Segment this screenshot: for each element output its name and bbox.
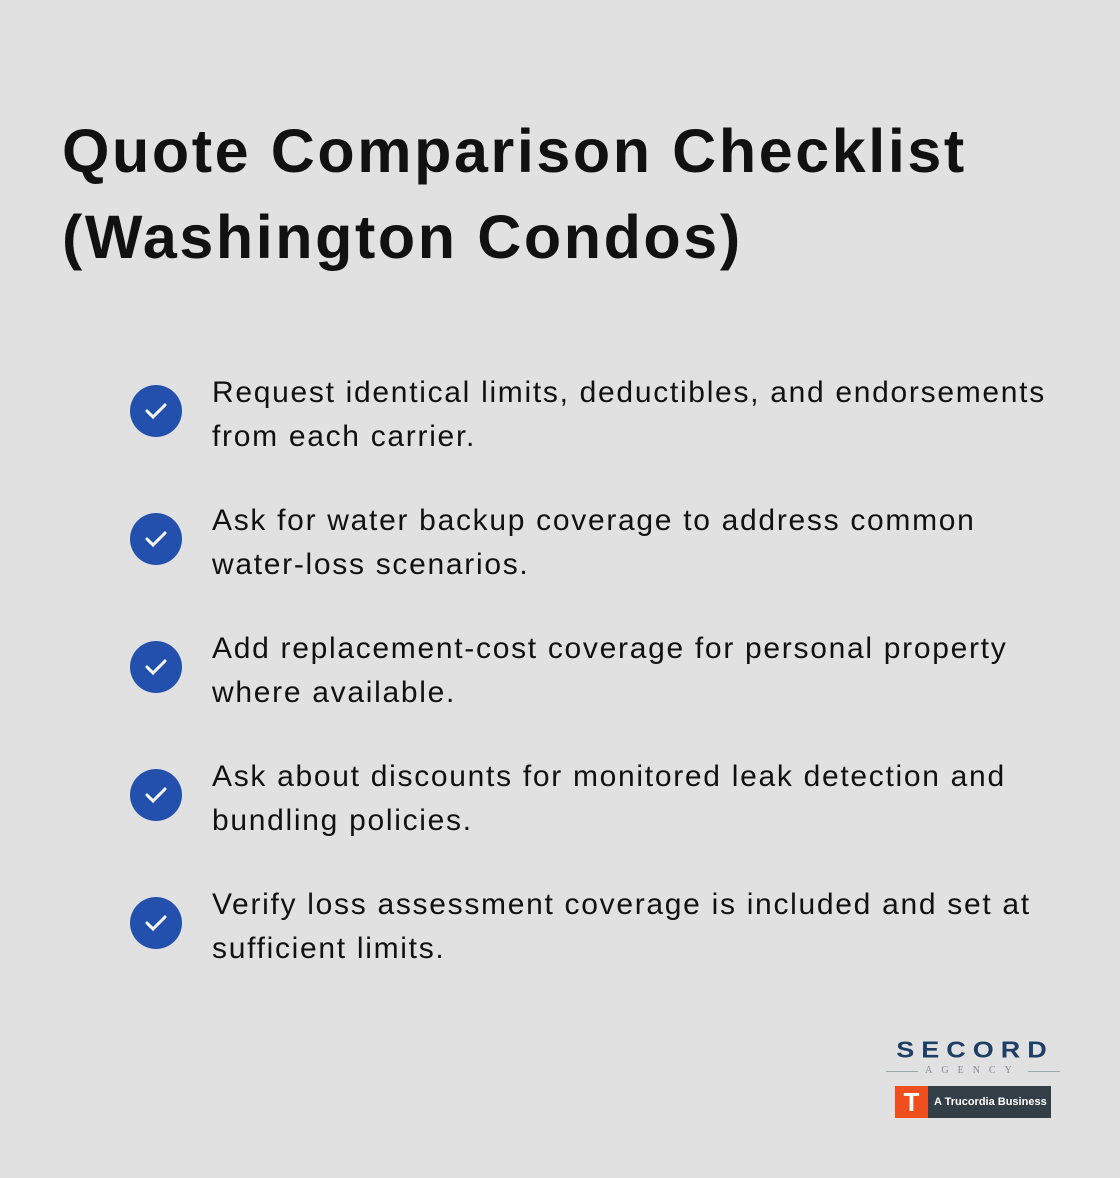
text 1: Request identical limits, deductibles, and endorsements [212,376,1046,409]
icon: check [130,513,182,565]
item 5 [130,888,1031,965]
logo agency: AGENCY [925,1065,1021,1076]
text 2: water-loss scenarios. [212,548,529,581]
text 2 [212,504,976,581]
logo wordmark: SECORD [896,1037,1054,1063]
text 5: Verify loss assessment coverage is included and set at [212,888,1031,921]
logo badge: A Trucordia Business [934,1096,1047,1108]
text 1 [212,376,1046,453]
icon: check [130,769,182,821]
item 4 [130,760,1006,837]
title: Quote Comparison Checklist [62,117,967,185]
item 2 [130,504,976,581]
item 3 [130,632,1007,709]
logo [886,1037,1060,1118]
text 4 [212,760,1006,837]
icon: check [130,641,182,693]
logo badge: T [904,1087,919,1117]
text 3: Add replacement-cost coverage for personal property [212,632,1007,665]
icon: check [130,385,182,437]
icon: check [130,897,182,949]
title: (Washington Condos) [62,203,743,271]
text 4: bundling policies. [212,804,473,837]
text 2: Ask for water backup coverage to address common [212,504,976,537]
text 4: Ask about discounts for monitored leak detection and [212,760,1006,793]
text 5 [212,888,1031,965]
item 1 [130,376,1046,453]
title [62,117,967,271]
logo badge [895,1086,1051,1118]
text 3: where available. [212,676,456,709]
text 3 [212,632,1007,709]
text 5: sufficient limits. [212,932,445,965]
text 1: from each carrier. [212,420,476,453]
